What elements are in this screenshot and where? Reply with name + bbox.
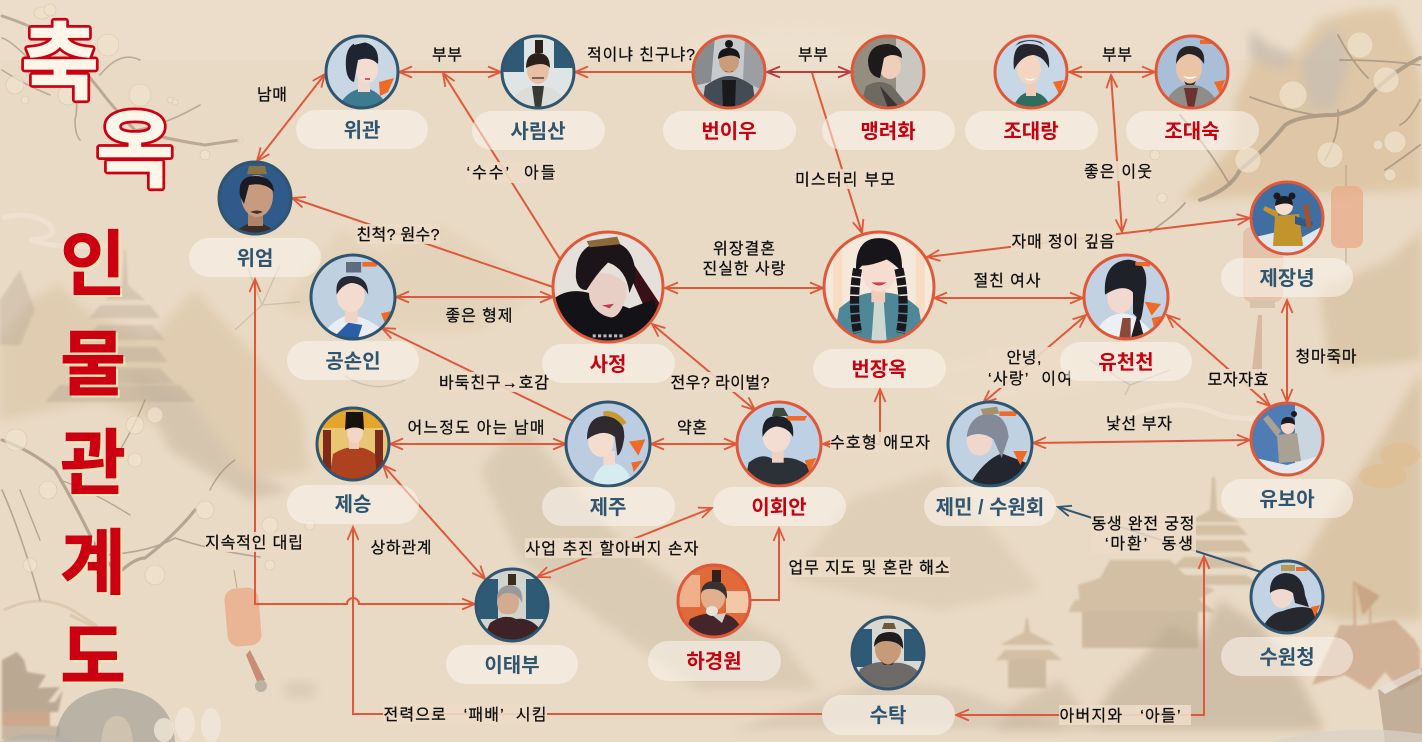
label: 안녕, 사랑 이여: 안녕, <box>1006 349 1042 367</box>
portrait: 제승 <box>317 408 389 480</box>
title: 인물관계도: 물 <box>62 328 128 407</box>
left pagoda <box>0 250 195 402</box>
name: 사림산: 사림산 <box>510 120 566 143</box>
portrait: 위엄 <box>219 162 291 234</box>
name: 위엄: 위엄 <box>237 247 273 270</box>
arrow: 번이우-맹려화 부부 <box>767 71 851 73</box>
portrait: 유천천 <box>1084 255 1168 339</box>
decorative cloud right <box>1359 443 1420 488</box>
arrow: 제승-이태부 <box>383 465 485 579</box>
label: 약혼: 약혼 <box>677 419 707 437</box>
name: 사정: 사정 <box>590 353 626 376</box>
portrait: 공손인 <box>311 255 395 339</box>
name: 하경원: 하경원 <box>686 650 742 673</box>
label: 낯선 부자: 낯선 부자 <box>1106 415 1172 433</box>
arrow: 수원청-제민 <box>1058 507 1261 572</box>
character: 조대숙 <box>1126 36 1259 150</box>
name: 사정 <box>542 344 675 383</box>
portrait: 이태부 <box>476 569 548 641</box>
title: 인물관계도: 인 <box>60 226 126 305</box>
portrait: 번장옥 <box>824 232 934 342</box>
arrow: 제장녕-유보아 <box>1286 300 1288 402</box>
name: 조대숙: 조대숙 <box>1164 120 1220 143</box>
character: 제민 / 수원회 <box>924 402 1056 526</box>
name: 번장옥: 번장옥 <box>851 358 907 381</box>
label: 바둑친구→호감: 바둑친구→호감 <box>439 374 549 392</box>
arrow: 사정-사림산 <box>443 73 560 259</box>
title: 인물관계도: 계 <box>62 527 128 606</box>
character: 수탁 <box>822 617 955 735</box>
character: 이태부 <box>446 569 578 684</box>
relation arrows <box>255 72 1287 715</box>
arrow: 좋은 이웃 <box>1111 75 1122 232</box>
bottom-right building <box>1378 668 1422 742</box>
title: 인물관계도: 관 <box>62 427 128 506</box>
arrow: 사정-공손인 <box>396 296 553 298</box>
arrow: 번장옥-유천천 <box>934 297 1083 299</box>
title: 인물관계도: 도 <box>60 619 126 698</box>
arrow: 제주-공손인 <box>382 328 575 422</box>
label: 동생 완전 궁정 마환 동생 <box>1091 513 1196 554</box>
title: 축옥 <box>21 16 174 198</box>
character: 조대랑 <box>965 36 1098 150</box>
plate ink washes <box>286 682 314 698</box>
label: 모자자효: 모자자효 <box>1208 371 1268 389</box>
character: 번장옥 <box>813 232 946 388</box>
character: 이회안 <box>713 402 846 526</box>
arrow: 제민-유보아 <box>1033 440 1250 443</box>
label: 안녕, 사랑 이여: ‘사랑’ 이여 <box>988 370 1072 388</box>
label: 미스터리 부모: 미스터리 부모 <box>795 171 895 189</box>
portrait: 제민 <box>948 402 1032 486</box>
name: 맹려화: 맹려화 <box>860 120 916 143</box>
label: 부부: 부부 <box>432 47 462 64</box>
arrow: 위엄-이태부 <box>255 279 475 604</box>
soldiers <box>1312 580 1420 690</box>
lower-left temple <box>2 652 63 740</box>
label: 아버지와 아들: 아버지와 ‘아들’ <box>1060 707 1180 725</box>
title: 인물관계도: 계 <box>60 525 126 604</box>
far left mountains <box>0 225 540 500</box>
arrow: 제민-유천천 <box>983 315 1086 403</box>
title: 축옥: 옥 <box>96 104 174 198</box>
arrow: 번장옥-제장녕 <box>927 218 1250 257</box>
character: 제승 <box>287 408 419 524</box>
character: 사정 <box>542 232 675 383</box>
title: 인물관계도: 물 <box>60 326 126 405</box>
label: 좋은 이웃: 좋은 이웃 <box>1084 163 1152 181</box>
arrow: 위관-사림산 부부 <box>399 71 501 73</box>
label: 지속적인 대립: 지속적인 대립 <box>205 534 303 552</box>
label: 동생 완전 궁정 마환 동생: 동생 완전 궁정 <box>1092 515 1194 533</box>
portrait: 맹려화 <box>852 36 924 108</box>
character: 위엄 <box>189 162 321 277</box>
foreground hills lower-right <box>995 600 1325 730</box>
portrait: 위관 <box>326 36 398 108</box>
label: 청마죽마: 청마죽마 <box>1296 348 1357 366</box>
title: 인물관계도 <box>60 226 128 700</box>
arrow: 사정-번장옥 <box>665 287 823 289</box>
label: 수호형 애모자: 수호형 애모자 <box>830 434 930 452</box>
arrow: 미스터리 부모 <box>812 73 862 233</box>
character: 공손인 <box>287 255 419 380</box>
label: 위장결혼 진실한 사랑: 진실한 사랑 <box>702 260 786 278</box>
relation labels <box>205 46 1357 725</box>
label: 자매 정이 깊음: 자매 정이 깊음 <box>1012 233 1114 251</box>
character: 번이우 <box>663 36 796 150</box>
label: 위장결혼 진실한 사랑: 위장결혼 <box>713 240 775 258</box>
character: 사림산 <box>472 36 605 150</box>
character: 제주 <box>542 402 675 526</box>
character: 유천천 <box>1060 255 1192 381</box>
character: 수원청 <box>1221 561 1353 676</box>
name: 번장옥 <box>813 349 946 388</box>
name: 조대랑: 조대랑 <box>1003 120 1059 143</box>
title: 축옥: 축 <box>21 16 99 110</box>
arrow: 이태부-이회안 <box>537 508 712 577</box>
label: 상하관계: 상하관계 <box>370 539 432 557</box>
name: 이태부: 이태부 <box>484 654 540 677</box>
name: 공손인: 공손인 <box>325 350 381 373</box>
label: 적이냐 친구냐?: 적이냐 친구냐? <box>587 46 695 64</box>
portrait: 수탁 <box>852 617 924 689</box>
portrait: 유보아 <box>1251 403 1323 475</box>
title: 인물관계도: 인 <box>62 228 128 307</box>
label: 동생 완전 궁정 마환 동생: ‘마환’ 동생 <box>1105 535 1193 553</box>
character: 맹려화 <box>822 36 955 150</box>
title: 축옥: 옥 <box>96 104 174 198</box>
arrow: 제주-이회안 <box>651 443 737 445</box>
arrow: 위관-위엄 남매 <box>257 74 325 161</box>
top-right mountain <box>1180 8 1422 200</box>
label: 절친 여사: 절친 여사 <box>974 272 1041 290</box>
label: 친척? 원수?: 친척? 원수? <box>356 226 440 244</box>
arrow: 번이우-사림산 <box>575 71 693 73</box>
crane <box>235 265 1170 395</box>
portrait: 조대랑 <box>995 36 1067 108</box>
portrait: 조대숙 <box>1156 36 1228 108</box>
arrow: 수탁-제승 <box>353 527 822 714</box>
name: 위관: 위관 <box>344 119 380 142</box>
arrow: 유천천-유보아 <box>1167 315 1270 406</box>
blossoms <box>5 4 1406 585</box>
portrait: 이회안 <box>737 402 821 486</box>
arrow: 제승-제주 <box>390 443 566 445</box>
character: 하경원 <box>648 565 781 681</box>
name: 유보아: 유보아 <box>1259 488 1315 511</box>
label: 전력으로 패배 시킴: 전력으로 ‘패배’ 시킴 <box>384 706 546 724</box>
character: 위관 <box>296 36 428 149</box>
arrow: 하경원-이회안 <box>750 528 779 600</box>
portrait: 사정 <box>553 232 663 342</box>
label: 안녕, 사랑 이여 <box>987 347 1073 388</box>
label: 남매: 남매 <box>257 86 287 104</box>
name: 이회안: 이회안 <box>751 496 807 519</box>
portrait: 사림산 <box>502 36 574 108</box>
portrait: 수원청 <box>1251 561 1323 633</box>
character: 유보아 <box>1221 403 1353 518</box>
name: 수원청: 수원청 <box>1259 646 1315 669</box>
title: 축옥: 축 <box>21 16 99 110</box>
portrait: 하경원 <box>678 565 750 637</box>
arrow: 사정-이회안 <box>652 324 755 410</box>
label: 수수 아들: ‘수수’ 아들 <box>466 164 556 182</box>
label: 사업 추진 할아버지 손자: 사업 추진 할아버지 손자 <box>526 540 699 558</box>
arrow: 이회안-번장옥 <box>823 389 880 444</box>
top-left branch <box>2 16 240 145</box>
right mountain <box>1300 234 1422 623</box>
name: 제승: 제승 <box>335 493 371 516</box>
character: 제장녕 <box>1221 182 1353 297</box>
swirl clouds left <box>2 215 1300 418</box>
name: 수탁: 수탁 <box>870 704 906 727</box>
title: 인물관계도: 도 <box>62 621 128 700</box>
portrait: 제주 <box>566 402 650 486</box>
label: 업무 지도 및 혼란 해소: 업무 지도 및 혼란 해소 <box>788 559 950 577</box>
name: 번이우: 번이우 <box>701 120 757 143</box>
top-right branch <box>1150 35 1420 232</box>
name: 유천천: 유천천 <box>1098 351 1154 374</box>
arrow: 조대랑-조대숙 부부 <box>1069 71 1155 73</box>
label: 전우? 라이벌?: 전우? 라이벌? <box>670 374 770 392</box>
label: 부부: 부부 <box>1102 47 1132 64</box>
label: 부부: 부부 <box>798 47 828 64</box>
portrait: 제장녕 <box>1251 182 1323 254</box>
title: 인물관계도: 관 <box>60 425 126 504</box>
name: 제민 / 수원회: 제민 / 수원회 <box>936 496 1044 519</box>
arrow: 수탁-수원청 <box>956 556 1204 715</box>
name: 제장녕: 제장녕 <box>1259 267 1315 290</box>
mid mountains <box>482 426 1032 730</box>
lower-left branch <box>2 400 260 600</box>
name: 제주: 제주 <box>590 496 626 519</box>
portrait: 번이우 <box>693 36 765 108</box>
lanterns <box>224 165 1363 692</box>
arrow: 사정-위엄 <box>292 198 553 287</box>
temple complex lower-right <box>996 477 1260 688</box>
label: 위장결혼 진실한 사랑 <box>702 240 786 278</box>
label: 좋은 형제: 좋은 형제 <box>446 307 512 325</box>
bottom-left cloud <box>0 688 221 742</box>
label: 어느정도 아는 남매: 어느정도 아는 남매 <box>408 419 544 437</box>
